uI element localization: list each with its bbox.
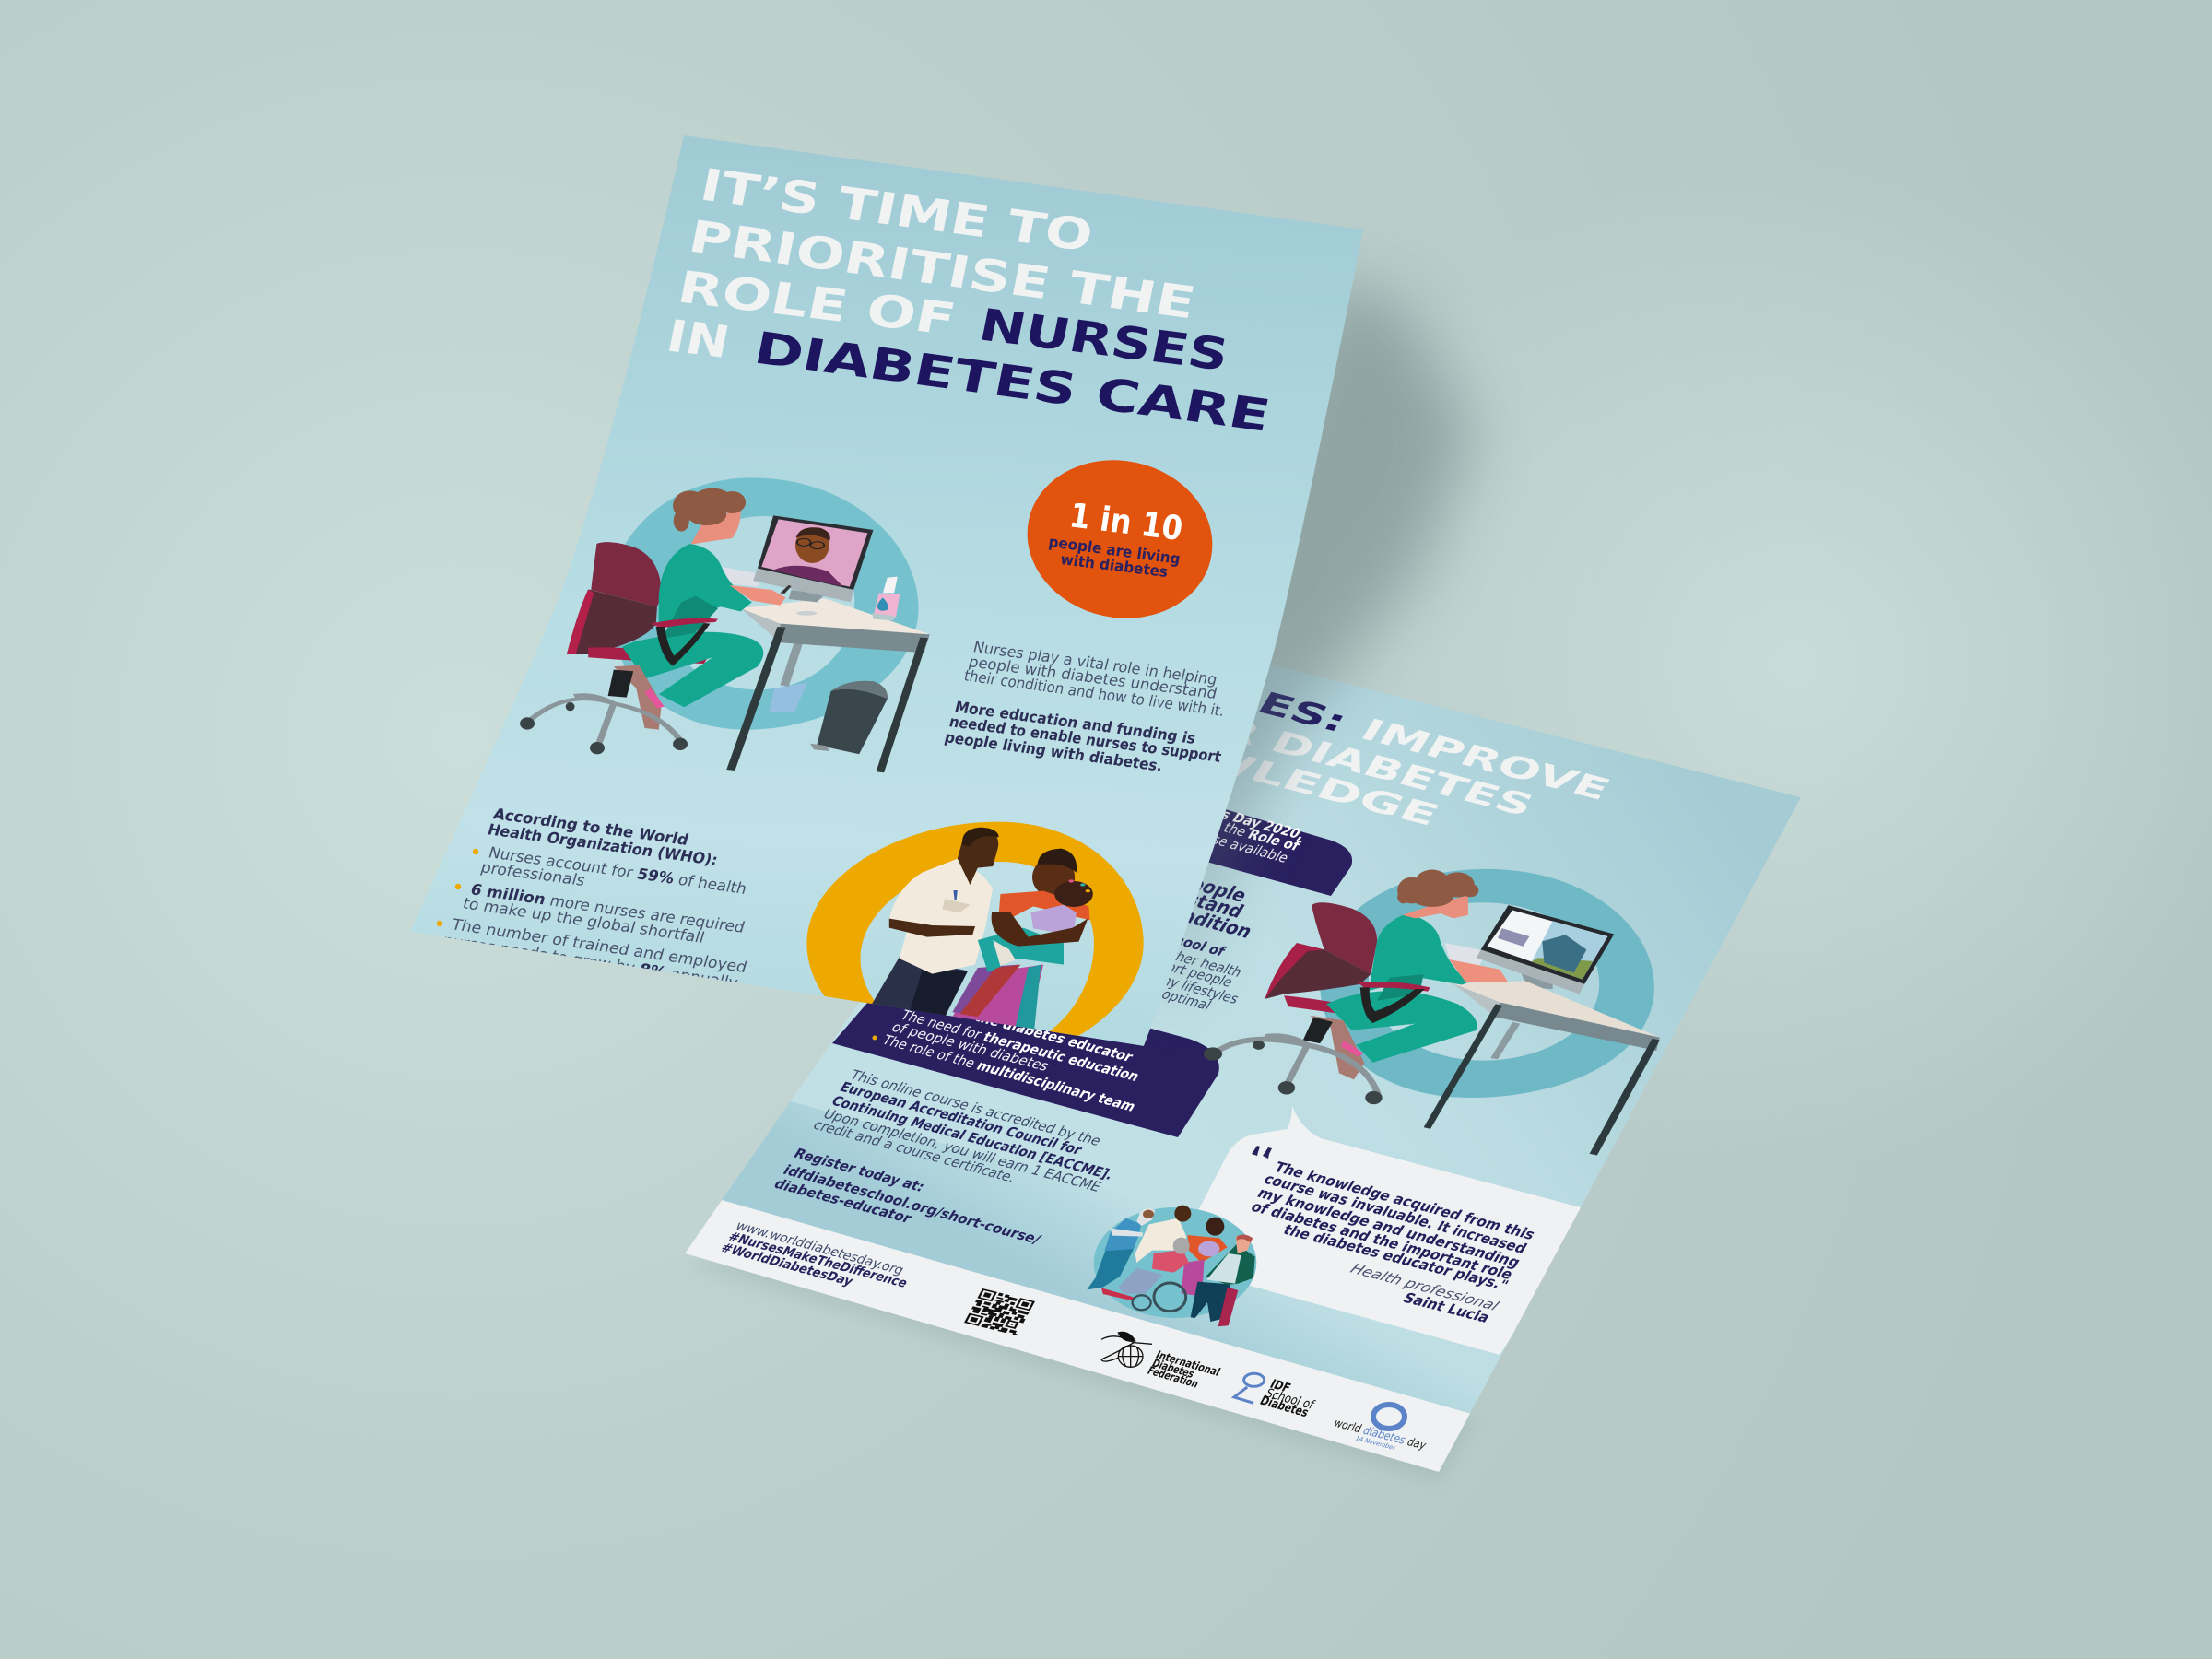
stat circle: 1 in 10: people are living xyxy=(1047,533,1182,568)
child xyxy=(1030,905,1077,935)
poster 2: course promotion xyxy=(685,627,1801,1472)
bin xyxy=(810,681,888,754)
quote speech bubble: of diabetes and the important role xyxy=(1248,1198,1516,1283)
back desk area xyxy=(1445,943,1488,984)
desk xyxy=(1453,981,1660,1038)
intro text: More education and funding is xyxy=(953,698,1197,747)
QR code xyxy=(964,1288,1035,1335)
quote speech bubble: my knowledge and understanding xyxy=(1254,1185,1524,1271)
nurse top xyxy=(659,544,752,627)
chair wheels xyxy=(1204,1041,1382,1104)
stat circle: 1 in 10: 1 in 10 xyxy=(1067,495,1185,548)
WHO statistics text: 6 million more nurses are required xyxy=(468,880,747,936)
poster 2 paper xyxy=(685,627,1801,1472)
teal ring xyxy=(608,477,918,730)
desk far surface xyxy=(723,567,763,587)
monitor xyxy=(753,515,873,602)
chair wheels xyxy=(520,702,688,754)
quote speech bubble xyxy=(1171,1106,1594,1355)
logo: International Diabetes Federation xyxy=(1101,1332,1222,1390)
soap bottle xyxy=(872,577,900,620)
mouse xyxy=(796,611,817,616)
accreditation text: credit and a course certificate. xyxy=(810,1116,1019,1186)
shawl xyxy=(978,928,1064,972)
accreditation text xyxy=(810,1066,1117,1195)
title: DIABETES CARE xyxy=(750,323,1274,442)
nurse head xyxy=(1136,1208,1155,1226)
footer links and hashtags: #NursesMakeTheDifference xyxy=(725,1230,911,1291)
body text: school of diabetes: other health xyxy=(1159,945,1245,981)
young man jacket xyxy=(1206,1244,1255,1285)
heading: help people understand their condition: understand xyxy=(1126,873,1248,922)
illustration: nurse at computer (poster 2) xyxy=(1204,869,1660,1156)
nurse trousers xyxy=(1087,1249,1134,1289)
intro text: Nurses play a vital role in helping xyxy=(971,638,1219,688)
quote speech bubble: course was invaluable. It increased xyxy=(1261,1171,1530,1257)
quote speech bubble: Health professional xyxy=(1347,1260,1503,1314)
monitor stand xyxy=(1521,972,1553,989)
accreditation text: Upon completion, you will earn 1 EACCME xyxy=(820,1106,1104,1195)
desk back leg xyxy=(780,642,803,687)
logo: IDF School of Diabetes: IDF xyxy=(1267,1378,1292,1395)
desk legs xyxy=(1424,1004,1502,1129)
teal circle xyxy=(1094,1207,1256,1318)
footer links and hashtags: #WorldDiabetesDay xyxy=(718,1241,856,1289)
title xyxy=(663,159,1274,442)
logo: IDF School of Diabetes xyxy=(1234,1373,1316,1420)
navy panel: course announcement xyxy=(1209,809,1353,896)
accreditation text: European Accreditation Council for xyxy=(837,1078,1086,1159)
person in wheelchair xyxy=(1152,1250,1189,1273)
poster 2 title: YOUR DIABETES xyxy=(1100,683,1540,823)
illustration: nurse on video call xyxy=(520,477,930,772)
poster 2 title: IMPROVE xyxy=(1354,712,1617,806)
logo: International Diabetes Federation: Diabetes xyxy=(1150,1357,1196,1381)
heading: help people understand their condition: Help people xyxy=(1125,856,1252,906)
skirt xyxy=(952,965,1043,1030)
navy panel: course topics: The role of the diabetes educator xyxy=(891,987,1136,1065)
WHO statistics text: Nurses account for 59% of health xyxy=(487,843,749,898)
WHO statistics text: According to the World xyxy=(491,805,690,849)
WHO statistics text: to make up the global shortfall xyxy=(461,894,707,947)
quote speech bubble: the diabetes educator plays." xyxy=(1280,1221,1512,1294)
armrest xyxy=(651,618,718,629)
WHO statistics text: nurses needs to grow by 8% annually xyxy=(441,931,740,992)
nurse top xyxy=(1369,915,1468,991)
title: IT’S TIME TO xyxy=(696,159,1097,262)
nurse curly hair xyxy=(1397,870,1478,907)
blue circle xyxy=(1373,1405,1405,1429)
skateboard xyxy=(1218,1288,1238,1326)
intro text: people living with diabetes. xyxy=(943,728,1165,775)
illustration: family with nurse xyxy=(806,822,1144,1065)
stat circle: 1 in 10 xyxy=(1013,443,1227,635)
WHO statistics text: Health Organization (WHO): xyxy=(486,820,720,869)
man trousers xyxy=(872,957,968,1017)
nurse arm and hand xyxy=(729,585,786,606)
logo: World Diabetes Day: world diabetes day xyxy=(1332,1416,1430,1452)
intro text xyxy=(943,638,1227,775)
accreditation text: This online course is accredited by the xyxy=(846,1066,1104,1149)
logo: World Diabetes Day: 14 November xyxy=(1354,1435,1397,1452)
nurse trousers xyxy=(1326,991,1477,1063)
title: NURSES xyxy=(975,300,1232,382)
teal ring xyxy=(1320,869,1654,1098)
bullet 2 xyxy=(455,884,461,889)
intro text: people with diabetes understand xyxy=(967,653,1219,702)
white footer band xyxy=(685,1200,1475,1472)
blouse xyxy=(998,891,1090,924)
poster 2 title: NURSES: xyxy=(1105,648,1354,739)
pen xyxy=(953,890,958,900)
soft shadow of the lower poster xyxy=(685,1198,1475,1482)
logo: International Diabetes Federation: Federation xyxy=(1146,1364,1201,1390)
young man trousers xyxy=(1191,1282,1230,1322)
man in white shirt xyxy=(1135,1218,1186,1263)
desk back leg xyxy=(1490,1022,1520,1059)
chair back xyxy=(1312,902,1377,974)
WHO statistics text: The number of trained and employed xyxy=(449,915,749,976)
illustration: group of people xyxy=(1087,1206,1256,1326)
orange disc xyxy=(1013,443,1227,635)
monitor xyxy=(1481,905,1614,984)
yellow ring xyxy=(806,822,1144,1065)
title: ROLE OF xyxy=(674,262,959,346)
quote speech bubble: Saint Lucia xyxy=(1400,1289,1493,1326)
logo: IDF School of Diabetes: School of xyxy=(1263,1387,1316,1413)
logo: International Diabetes Federation: International xyxy=(1154,1348,1222,1379)
footer links and hashtags: www.worlddiabetesday.org xyxy=(733,1218,907,1278)
navy panel: course announcement: the Role of xyxy=(1220,819,1303,854)
navy panel: course topics xyxy=(832,1003,1219,1137)
quotation mark xyxy=(1252,1146,1272,1159)
body text: school of diabetes: optimal xyxy=(1159,986,1215,1014)
nurse trousers xyxy=(622,632,763,707)
poster 1: main poster xyxy=(410,135,1363,1065)
poster 1 paper xyxy=(410,135,1363,1046)
nurse head xyxy=(691,507,741,545)
woman arm xyxy=(992,912,1088,947)
registration link: diabetes-educator xyxy=(771,1175,915,1227)
navy panel: course topics: The role of the multidisciplinary team xyxy=(878,1031,1139,1114)
bullet 3 xyxy=(437,921,442,926)
desk legs xyxy=(726,627,786,771)
body text: school of diabetes: IDF School of xyxy=(1126,920,1229,959)
navy panel: course announcement: course available xyxy=(1181,824,1292,866)
cast shadow of the top poster xyxy=(1161,276,1475,1023)
heading: help people understand their condition xyxy=(1189,881,1250,938)
WHO statistics text: professionals xyxy=(478,858,587,889)
nurse top xyxy=(1104,1218,1141,1251)
poster 2 title: KNOWLEDGE xyxy=(1065,708,1445,832)
bird and globe xyxy=(1101,1332,1152,1367)
bullet 1 xyxy=(473,849,478,854)
nurse sleeve xyxy=(1111,1229,1143,1237)
man arm xyxy=(889,919,975,937)
man head xyxy=(958,830,998,885)
navy panel: course topics: of people with diabetes xyxy=(888,1018,1053,1075)
chair back xyxy=(591,542,662,606)
poster 2 title xyxy=(1237,691,1609,825)
chair base xyxy=(1303,1018,1333,1043)
stat circle: 1 in 10: with diabetes xyxy=(1059,550,1169,581)
shoes xyxy=(614,665,662,730)
intro text: their condition and how to live with it. xyxy=(962,666,1227,720)
man shirt xyxy=(889,859,993,974)
body text: school of diabetes xyxy=(1162,938,1241,1010)
quote speech bubble: The knowledge acquired from this xyxy=(1271,1159,1538,1243)
background light patch xyxy=(1290,157,2212,1171)
registration link: idfdiabeteschool.org/short-course/ xyxy=(780,1161,1044,1248)
WHO statistics text xyxy=(437,805,749,992)
nurse curly hair xyxy=(673,488,746,532)
blue person mark xyxy=(1234,1373,1265,1403)
armrest xyxy=(1358,982,1430,992)
mother and child xyxy=(1187,1235,1228,1263)
title: IN xyxy=(663,311,734,369)
bullet xyxy=(872,1036,877,1040)
poster 2 lower tint xyxy=(723,1101,1470,1413)
navy panel: course topics: The need for therapeutic education xyxy=(897,1006,1143,1085)
accreditation text: Continuing Medical Education [EACCME]. xyxy=(829,1092,1117,1183)
heading: help people understand their condition: their condition xyxy=(1104,885,1257,942)
shoes xyxy=(1310,1016,1364,1079)
registration link: Register today at: xyxy=(791,1145,928,1195)
title: PRIORITISE THE xyxy=(685,211,1200,329)
desk xyxy=(741,598,930,634)
body text: school of diabetes: healthy lifestyles xyxy=(1127,964,1242,1007)
body text: school of diabetes: support people xyxy=(1133,950,1236,991)
logo: IDF School of Diabetes: Diabetes xyxy=(1257,1394,1311,1420)
nurse hand xyxy=(1449,959,1508,982)
chair base xyxy=(608,670,633,698)
navy panel: course announcement: World Diabetes Day 2020, xyxy=(1117,780,1309,843)
intro text: needed to enable nurses to support xyxy=(947,712,1223,766)
mockup scene: two overlapping posters xyxy=(0,109,2040,1477)
woman head xyxy=(1032,857,1075,897)
blue paper xyxy=(769,683,807,712)
